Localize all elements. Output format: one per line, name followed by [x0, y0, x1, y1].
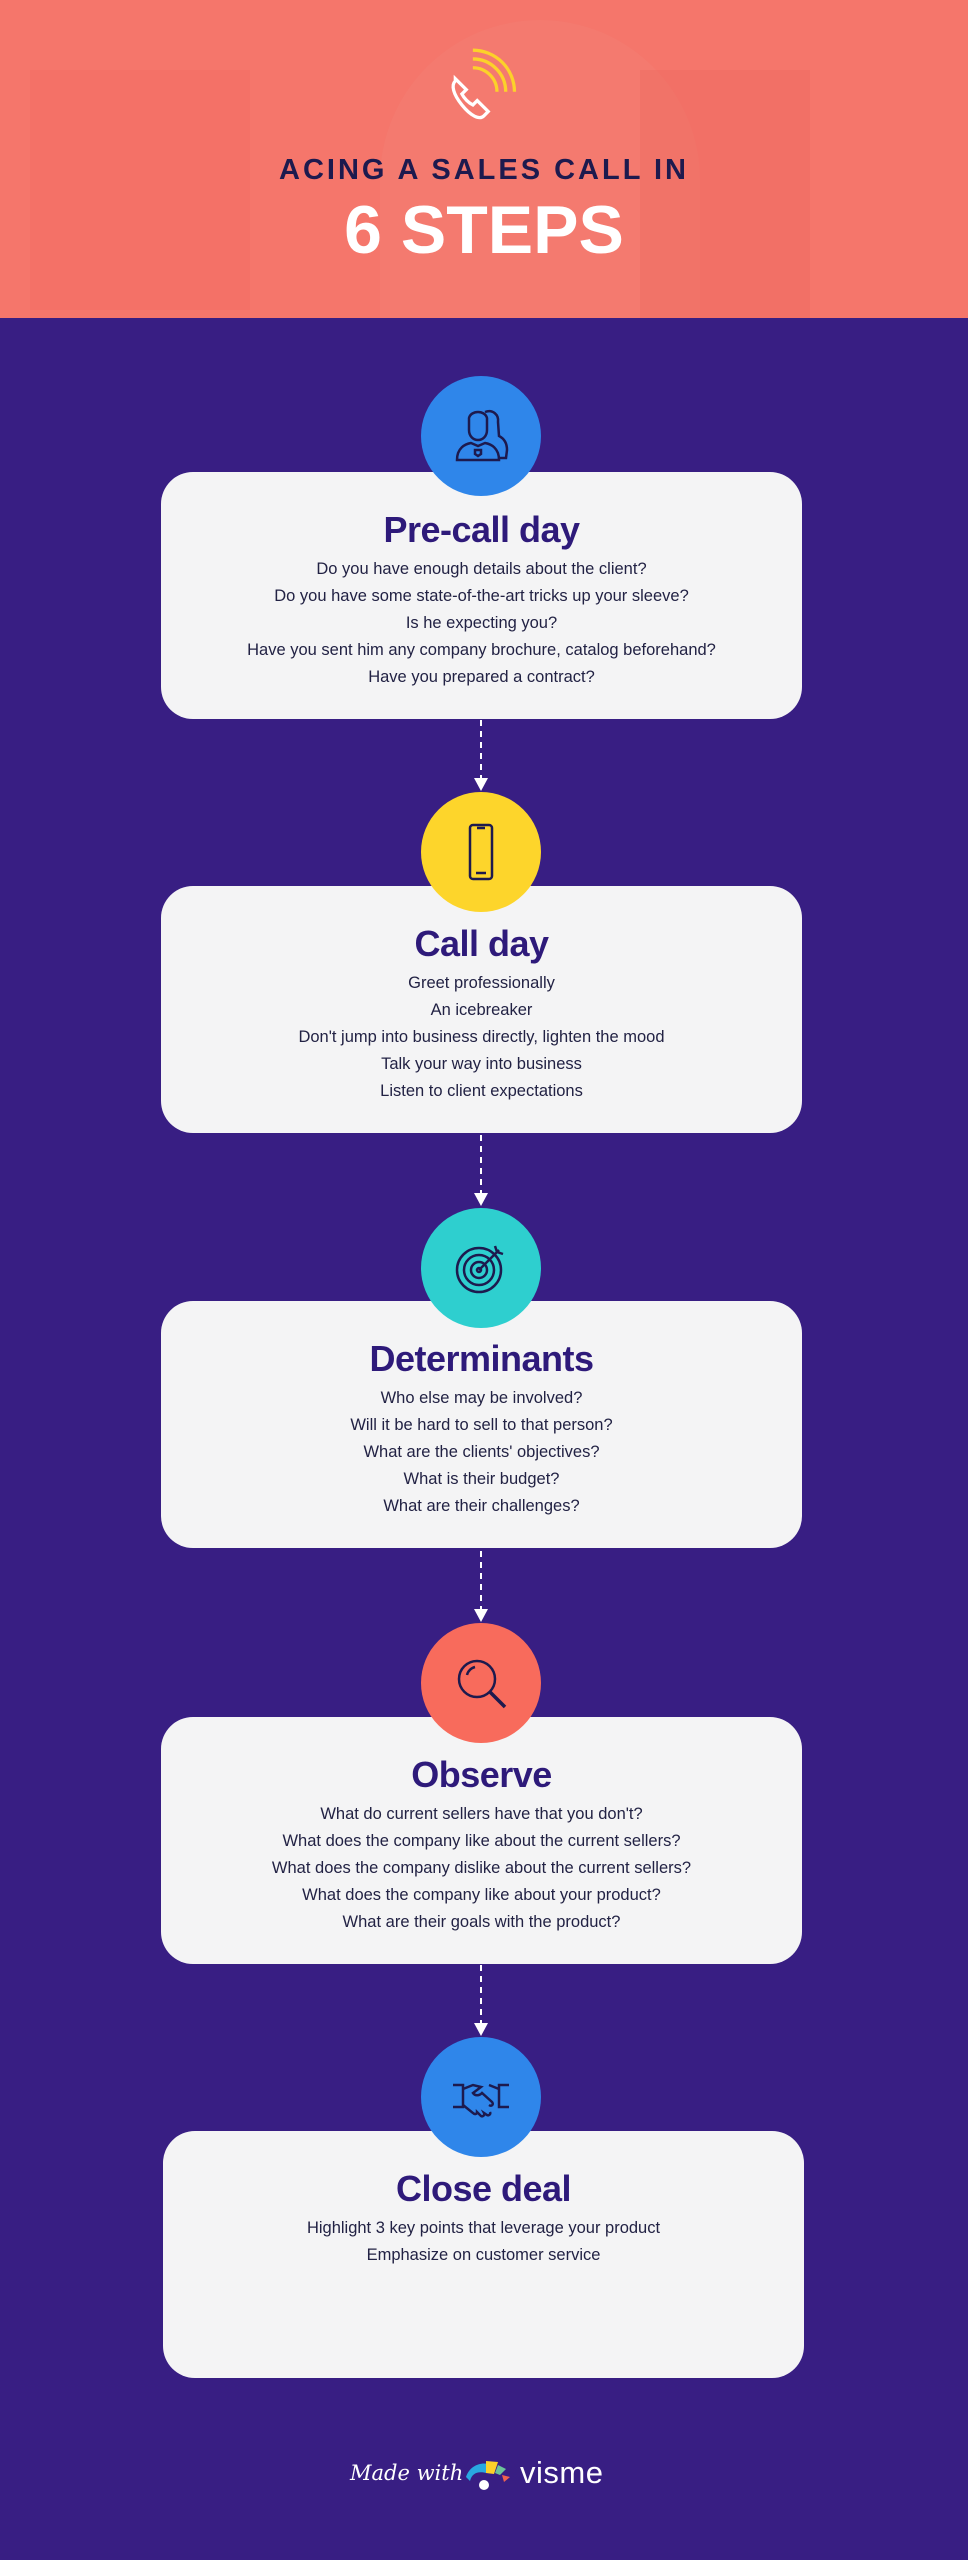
card 4: observe: Observe — [411, 1754, 552, 1795]
card 4: observe: What are their goals with the product? — [343, 1913, 620, 1931]
card 4: observe — [161, 1717, 802, 1964]
card 3: determinants: What are the clients' objectives? — [363, 1443, 600, 1461]
card 2: call day: Greet professionally — [408, 974, 555, 992]
card 3: determinants: What is their budget? — [404, 1470, 559, 1488]
title line 2: 6 STEPS — [344, 192, 624, 268]
card 2: call day — [161, 886, 802, 1133]
card 1: pre-call day: Do you have enough details about the client? — [316, 560, 647, 578]
header banner — [0, 0, 968, 318]
card 1: pre-call day: Pre-call day — [383, 509, 580, 550]
card 3: determinants — [161, 1301, 802, 1548]
footer: made with visme: Made with — [350, 2461, 463, 2485]
card 5: close deal: Emphasize on customer service — [367, 2246, 600, 2264]
card 5: close deal — [163, 2131, 804, 2378]
title line 1: ACING A SALES CALL IN — [279, 154, 689, 186]
card 5: close deal: Highlight 3 key points that leverage your product — [307, 2219, 660, 2237]
arrow 1 — [474, 720, 488, 791]
icon: magnifier — [421, 1623, 541, 1743]
card 2: call day: An icebreaker — [431, 1001, 532, 1019]
icon: smartphone — [421, 792, 541, 912]
card 4: observe: What does the company dislike about the current sellers? — [272, 1859, 691, 1877]
card 3: determinants: Determinants — [369, 1338, 594, 1379]
card 3: determinants: Will it be hard to sell to that person? — [350, 1416, 613, 1434]
card 3: determinants: What are their challenges? — [383, 1497, 580, 1515]
card 4: observe: What does the company like about the current sellers? — [282, 1832, 681, 1850]
card 2: call day: Call day — [414, 923, 549, 964]
card 2: call day: Don't jump into business directly, lighten the mood — [298, 1028, 665, 1046]
card 5: close deal: Close deal — [396, 2168, 571, 2209]
icon: visme logo — [466, 2461, 510, 2490]
card 2: call day: Listen to client expectations — [380, 1082, 583, 1100]
card 3: determinants: Who else may be involved? — [381, 1389, 582, 1407]
icon: target — [421, 1208, 541, 1328]
card 1: pre-call day: Have you prepared a contract? — [368, 668, 595, 686]
arrow 2 — [474, 1135, 488, 1206]
card 1: pre-call day: Have you sent him any company brochure, catalog beforehand? — [247, 641, 716, 659]
icon: phone with signal — [452, 48, 516, 120]
card 4: observe: What do current sellers have that you don't? — [320, 1805, 643, 1823]
footer: made with visme: visme — [520, 2455, 603, 2490]
footer: made with visme — [350, 2455, 603, 2490]
card 1: pre-call day — [161, 472, 802, 719]
icon: users — [421, 376, 541, 496]
card 1: pre-call day: Is he expecting you? — [406, 614, 557, 632]
card 4: observe: What does the company like about your product? — [302, 1886, 661, 1904]
icon: handshake — [421, 2037, 541, 2157]
arrow 3 — [474, 1551, 488, 1622]
arrow 4 — [474, 1965, 488, 2036]
card 2: call day: Talk your way into business — [381, 1055, 582, 1073]
card 1: pre-call day: Do you have some state-of-the-art tricks up your sleeve? — [274, 587, 689, 605]
